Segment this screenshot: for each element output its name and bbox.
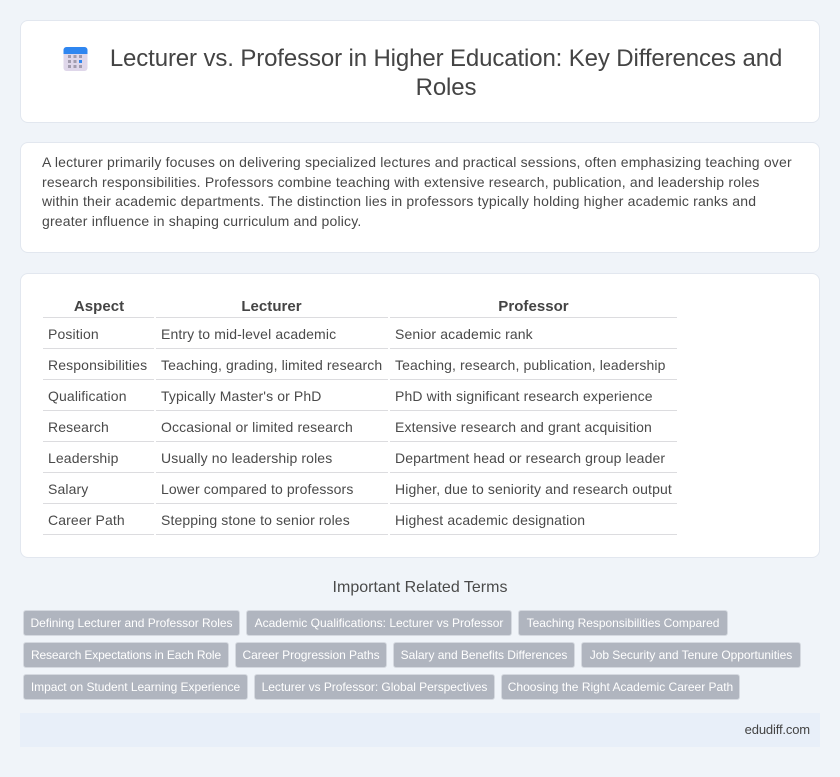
text block: introduction: research responsibilities. Professors combine teaching with extensive research, publication, and leadership roles [42, 174, 760, 190]
comparison table [43, 298, 677, 535]
footer bar [20, 713, 820, 747]
comparison table: Lecturer [241, 298, 302, 315]
tag list: related terms: Impact on Student Learning Experience [31, 680, 240, 694]
text block: introduction: A lecturer primarily focuses on delivering specialized lectures and practical sessions, often emphasizing teaching over [42, 154, 792, 170]
comparison table: Qualification [48, 388, 127, 404]
tag list: related terms: Lecturer vs Professor: Global Perspectives [262, 680, 487, 694]
comparison table: Leadership [48, 450, 118, 466]
tag list: related terms: Job Security and Tenure Opportunities [590, 648, 792, 662]
comparison table: Typically Master's or PhD [161, 388, 322, 404]
comparison table: Teaching, grading, limited research [161, 357, 382, 373]
comparison table: Professor [498, 298, 569, 315]
comparison table: PhD with significant research experience [395, 388, 653, 404]
footer source: edudiff.com [745, 722, 810, 737]
comparison table: Senior academic rank [395, 326, 533, 342]
comparison table: Highest academic designation [395, 512, 585, 528]
text block: introduction: within their academic departments. The distinction lies in professors typically holding higher academic ranks and [42, 193, 756, 209]
comparison table: Occasional or limited research [161, 419, 353, 435]
comparison table: Higher, due to seniority and research output [395, 481, 672, 497]
text block: introduction: greater influence in shaping curriculum and policy. [42, 213, 361, 229]
tag list: related terms: Choosing the Right Academic Career Path [508, 680, 733, 694]
text block: introduction [42, 154, 792, 229]
comparison table: Research [48, 419, 109, 435]
tag list: related terms: Teaching Responsibilities Compared [527, 616, 719, 630]
panel: introduction [20, 142, 820, 253]
tag list: related terms [23, 610, 801, 700]
comparison table: Position [48, 326, 99, 342]
tag list: related terms: Career Progression Paths [242, 648, 380, 662]
tag list: related terms: Salary and Benefits Differences [401, 648, 567, 662]
comparison table: Stepping stone to senior roles [161, 512, 350, 528]
panel: comparison table [20, 273, 820, 558]
comparison table: Teaching, research, publication, leadership [395, 357, 666, 373]
comparison table: Department head or research group leader [395, 450, 665, 466]
title: Roles [416, 74, 476, 101]
tag list: related terms: Academic Qualifications: Lecturer vs Professor [255, 616, 503, 630]
icon: calendar [64, 47, 88, 71]
tag list: related terms: Research Expectations in Each Role [31, 648, 221, 662]
comparison table: Entry to mid-level academic [161, 326, 336, 342]
comparison table: Salary [48, 481, 88, 497]
comparison table: Lower compared to professors [161, 481, 353, 497]
comparison table: Extensive research and grant acquisition [395, 419, 652, 435]
comparison table: Usually no leadership roles [161, 450, 332, 466]
tag list: related terms: Defining Lecturer and Professor Roles [31, 616, 232, 630]
title [110, 45, 782, 101]
comparison table: Career Path [48, 512, 125, 528]
heading: related terms: Important Related Terms [333, 579, 507, 596]
title: Lecturer vs. Professor in Higher Education: Key Differences and [110, 45, 782, 72]
comparison table: Responsibilities [48, 357, 147, 373]
comparison table: Aspect [74, 298, 124, 315]
panel: title card [20, 20, 820, 123]
